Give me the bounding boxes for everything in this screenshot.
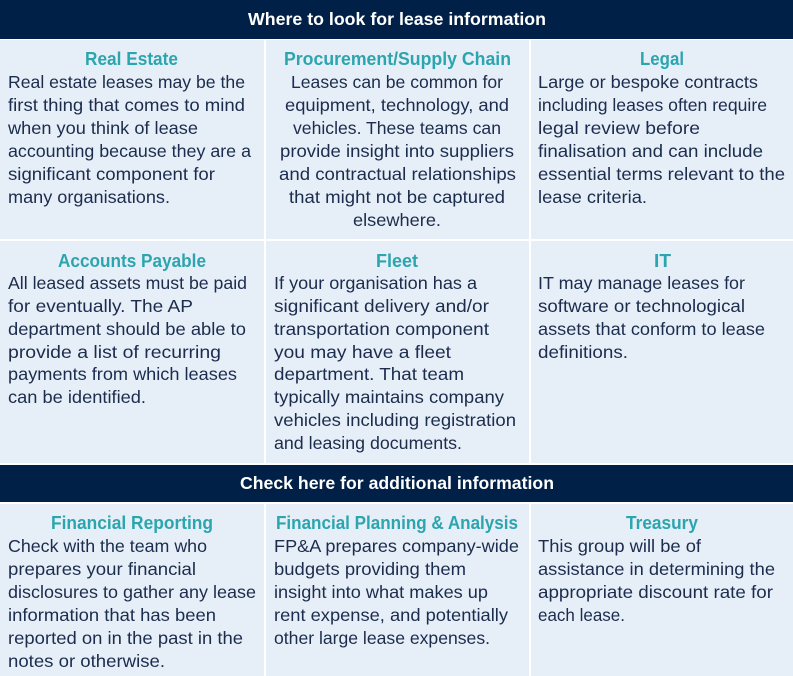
text: financial planning and analysis: rent expense, and potentially: [274, 605, 508, 625]
text: treasury: [538, 536, 775, 625]
text: real estate: significant component for: [8, 164, 215, 184]
panel: real estate: [0, 40, 264, 239]
text: procurement: equipment, technology, and: [285, 95, 509, 115]
panel: fleet: [266, 241, 529, 463]
header: additional information: [0, 465, 793, 502]
text: real estate: when you think of lease: [7, 118, 198, 138]
text: fleet: department. That team: [274, 364, 464, 384]
text: accounts payable: provide a list of recurring: [8, 342, 221, 362]
text: real estate: [7, 72, 251, 207]
heading: procurement: Procurement/Supply Chain: [284, 49, 511, 69]
header: where to look: [0, 0, 793, 39]
text: financial planning and analysis: [274, 536, 519, 648]
panel: financial planning and analysis: [266, 504, 529, 676]
heading: accounts payable: Accounts Payable: [58, 251, 206, 271]
text: financial planning and analysis: FP&A prepares company-wide: [274, 536, 519, 556]
text: procurement: [279, 72, 516, 230]
text: accounts payable: All leased assets must be paid: [8, 273, 247, 293]
text: procurement: elsewhere.: [353, 210, 441, 230]
text: procurement: and contractual relationships: [279, 164, 516, 184]
heading: financial planning and analysis: Financial Planning & Analysis: [276, 513, 518, 533]
panel: financial reporting: [0, 504, 264, 676]
text: financial reporting: prepares your financial: [8, 559, 196, 579]
text: IT: definitions.: [538, 342, 628, 362]
text: procurement: Leases can be common for: [291, 72, 503, 92]
text: real estate: Real estate leases may be the: [8, 72, 245, 92]
text: real estate: many organisations.: [8, 187, 170, 207]
text: real estate: first thing that comes to mind: [8, 95, 245, 115]
text: procurement: that might not be captured: [289, 187, 505, 207]
header: additional information: Check here for additional information: [240, 473, 554, 493]
heading: fleet: Fleet: [376, 251, 418, 271]
text: real estate: accounting because they are a: [8, 141, 251, 161]
heading: real estate: Real Estate: [85, 49, 178, 69]
text: financial reporting: [8, 536, 256, 671]
text: legal: including leases often require: [538, 95, 767, 115]
text: procurement: vehicles. These teams can: [293, 118, 501, 138]
heading: financial reporting: Financial Reporting: [51, 513, 213, 533]
text: legal: essential terms relevant to the: [538, 164, 785, 184]
text: IT: assets that conform to lease: [538, 319, 765, 339]
panel: legal: [531, 40, 793, 239]
text: legal: lease criteria.: [538, 187, 647, 207]
text: fleet: transportation component: [274, 319, 489, 339]
text: financial planning and analysis: insight into what makes up: [274, 582, 488, 602]
text: fleet: [274, 273, 516, 453]
heading: treasury: Treasury: [626, 513, 698, 533]
heading: legal: Legal: [640, 49, 684, 69]
text: accounts payable: payments from which leases: [8, 364, 237, 384]
text: fleet: If your organisation has a: [274, 273, 477, 293]
text: accounts payable: for eventually. The AP: [8, 296, 193, 316]
text: accounts payable: [8, 273, 247, 407]
text: treasury: appropriate discount rate for: [538, 582, 773, 602]
text: financial planning and analysis: other large lease expenses.: [274, 628, 490, 648]
panel: accounts payable: [0, 241, 264, 463]
panel: procurement: [266, 40, 529, 239]
text: accounts payable: can be identified.: [8, 387, 146, 407]
text: fleet: and leasing documents.: [274, 433, 462, 453]
text: fleet: vehicles including registration: [274, 410, 516, 430]
text: financial reporting: disclosures to gather any lease: [8, 582, 256, 602]
text: legal: Large or bespoke contracts: [538, 72, 758, 92]
text: financial reporting: notes or otherwise.: [8, 651, 165, 671]
text: accounts payable: department should be able to: [8, 319, 246, 339]
text: legal: finalisation and can include: [538, 141, 763, 161]
text: legal: [538, 72, 785, 207]
text: legal: legal review before: [538, 118, 700, 138]
panel: IT: [531, 241, 793, 463]
text: fleet: you may have a fleet: [274, 342, 451, 362]
text: treasury: This group will be of: [538, 536, 701, 556]
heading: IT: IT: [654, 251, 671, 271]
header: where to look: Where to look for lease information: [248, 9, 546, 29]
text: financial reporting: reported on in the past in the: [8, 628, 243, 648]
text: IT: software or technological: [538, 296, 745, 316]
text: IT: [538, 273, 765, 362]
text: treasury: each lease.: [538, 605, 625, 625]
text: financial reporting: information that has been: [8, 605, 216, 625]
panel: treasury: [531, 504, 793, 676]
text: financial planning and analysis: budgets providing them: [274, 559, 466, 579]
text: fleet: significant delivery and/or: [274, 296, 489, 316]
text: treasury: assistance in determining the: [538, 559, 775, 579]
text: financial reporting: Check with the team who: [8, 536, 207, 556]
text: procurement: provide insight into suppliers: [280, 141, 514, 161]
text: IT: IT may manage leases for: [538, 273, 745, 293]
text: fleet: typically maintains company: [274, 387, 504, 407]
